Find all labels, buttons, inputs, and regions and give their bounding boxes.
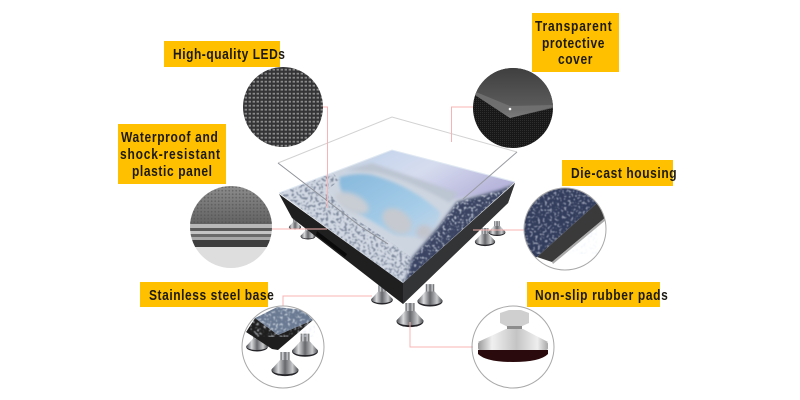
icon: housing closeup circle [524, 188, 607, 270]
glass cover front edges [278, 152, 517, 244]
leader: rubber pads [410, 322, 473, 347]
foot: right rear [489, 221, 505, 236]
label: Stainless steel base: Stainless steel base [149, 287, 274, 303]
tile housing [279, 183, 515, 304]
label: Die-cast housing: Die-cast housing [571, 165, 677, 181]
leader: cover [452, 107, 473, 142]
leader: LEDs [322, 107, 328, 208]
leader: stainless base [283, 296, 372, 306]
icon: stainless base closeup circle [242, 306, 324, 388]
icon: rubber pad closeup circle [472, 306, 554, 388]
leader: housing [473, 229, 525, 231]
label: Die-cast housing [562, 160, 677, 186]
label: Non-slip rubber pads: Non-slip rubber pads [535, 287, 668, 303]
label: Transparent protective cover [532, 13, 619, 72]
label: Waterproof and shock-resistant plastic panel: shock-resistant [120, 146, 220, 162]
housing right shade [403, 183, 515, 304]
icon: LED closeup circle [243, 67, 323, 147]
label: Transparent protective cover: Transparent [535, 18, 612, 34]
label: Stainless steel base [140, 282, 274, 307]
label: Non-slip rubber pads [527, 282, 668, 307]
foot: rear left [289, 219, 301, 230]
icon: plastic panel closeup circle [190, 186, 272, 269]
foot: left [301, 226, 315, 239]
icon: protective cover closeup circle [473, 68, 553, 148]
LED floor tile [270, 145, 520, 304]
glass cover back edges [278, 117, 517, 163]
leader: plastic panel [271, 228, 327, 230]
housing slot [316, 231, 347, 257]
foot: front right [417, 284, 443, 307]
feet [289, 219, 505, 327]
tile top edge highlight [279, 150, 515, 193]
label: Waterproof and shock-resistant plastic panel [118, 124, 226, 184]
label: Waterproof and shock-resistant plastic panel: Waterproof and [121, 129, 218, 145]
foot: right [475, 228, 495, 246]
foot: front [396, 303, 424, 327]
base feet [246, 332, 318, 376]
tile screen image [280, 150, 514, 283]
label: Transparent protective cover: protective [542, 35, 605, 51]
label: High-quality LEDs [164, 41, 285, 67]
leader lines [271, 107, 525, 347]
label: High-quality LEDs: High-quality LEDs [173, 46, 285, 62]
foot: front left [371, 285, 393, 304]
label: Transparent protective cover: cover [558, 51, 593, 67]
label: Waterproof and shock-resistant plastic panel: plastic panel [132, 163, 212, 179]
